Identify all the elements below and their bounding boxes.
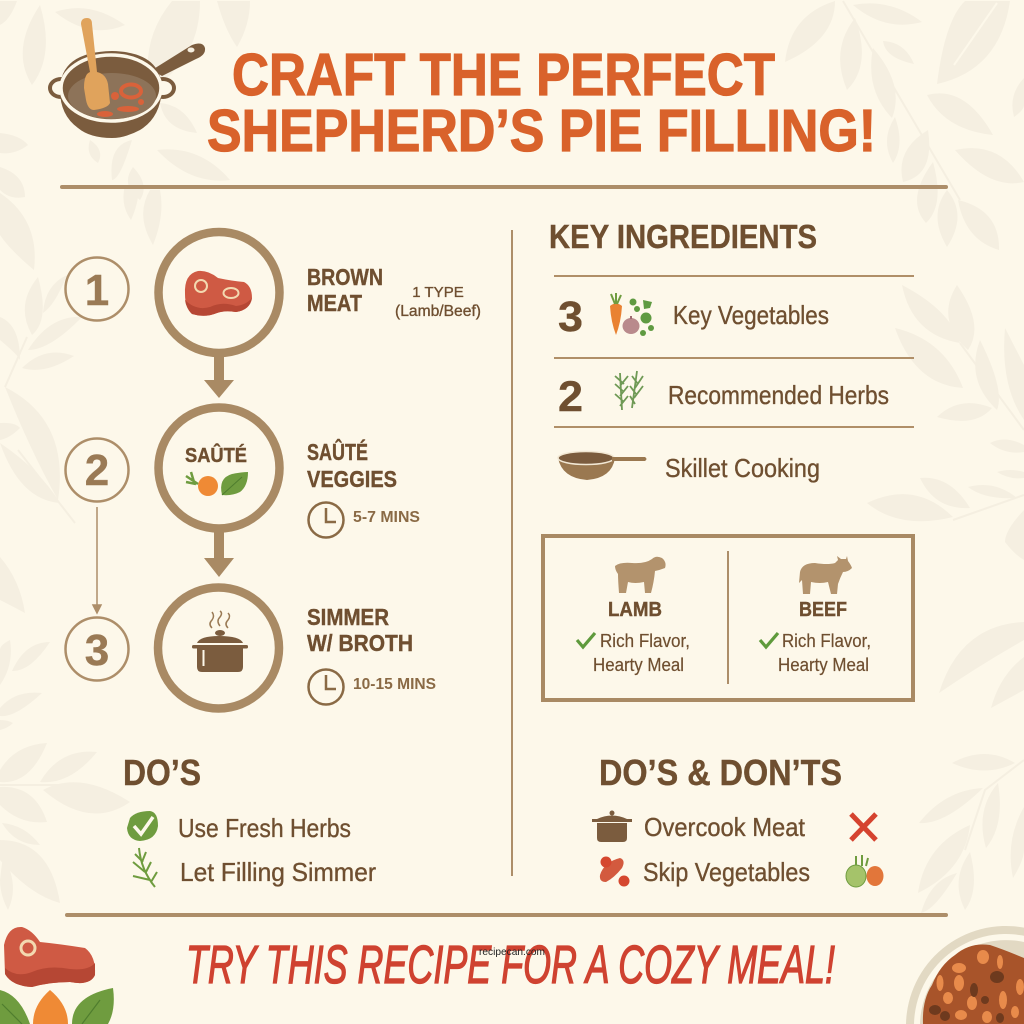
illustration: steak and veggies bottom left — [0, 927, 114, 1024]
title: CRAFT THE PERFECT — [232, 42, 775, 108]
step 2 circle with veggies: SAÛTÉ — [185, 443, 247, 467]
step 3 label: SIMMER — [307, 604, 389, 630]
step 2 label — [307, 438, 397, 492]
ingredient row: vegetables: 3 — [558, 293, 583, 341]
do item: let simmer — [133, 848, 376, 887]
step 2 circle with veggies — [158, 408, 280, 528]
step 3 label: W/ BROTH — [307, 630, 413, 656]
do's and don'ts heading: DO’S & DON’TS — [599, 752, 842, 793]
step 1 number — [66, 258, 128, 320]
arrow: step 1 to step 2 — [204, 356, 234, 398]
icon: herbs — [615, 371, 643, 410]
ingredient row: herbs — [558, 371, 889, 421]
icon: vegetables — [610, 293, 654, 336]
ingredient row: skillet — [558, 452, 820, 483]
beef column: BEEF — [799, 599, 847, 621]
icon: skillet small — [558, 452, 646, 480]
arrow: step 2 to step 3 thin — [93, 507, 101, 613]
step 2 — [66, 408, 420, 538]
step 3 number: 3 — [85, 626, 109, 675]
step 1 label: MEAT — [307, 290, 362, 316]
lamb column: LAMB — [608, 599, 662, 621]
do's heading: DO’S — [123, 752, 201, 793]
step 3 circle with pot — [158, 588, 279, 708]
lamb column — [577, 557, 690, 675]
step 2 time: 5-7 MINS — [353, 509, 420, 526]
do item: let simmer: Let Filling Simmer — [180, 857, 376, 887]
step 1 label — [307, 264, 383, 316]
icon: cow — [799, 556, 852, 594]
don't item: overcook: Overcook Meat — [644, 812, 806, 842]
ingredient row: herbs: 2 — [558, 373, 583, 421]
step 1 circle with steak — [158, 232, 280, 353]
ingredient row: herbs: Recommended Herbs — [668, 380, 889, 410]
ingredient row: vegetables: Key Vegetables — [673, 300, 829, 330]
lamb column: Rich Flavor, — [600, 631, 690, 651]
step 3 label — [307, 604, 413, 656]
panel: lamb vs beef — [543, 536, 913, 700]
title: SHEPHERD’S PIE FILLING! — [207, 98, 876, 164]
don't item: skip vegetables — [600, 855, 884, 887]
arrow: step 2 to step 3 — [204, 531, 234, 577]
key ingredients heading: KEY INGREDIENTS — [549, 218, 817, 255]
beef column: Rich Flavor, — [782, 631, 871, 651]
watermark: recipecan.com — [479, 946, 545, 958]
meat type note: (Lamb/Beef) — [395, 303, 481, 320]
step 3 number — [66, 618, 128, 680]
do item: fresh herbs — [127, 811, 351, 843]
do item: fresh herbs: Use Fresh Herbs — [178, 813, 351, 843]
step 1 — [66, 232, 481, 353]
meat type note — [395, 284, 481, 320]
step 3 time: 10-15 MINS — [353, 676, 436, 693]
step 2 label: VEGGIES — [307, 466, 397, 492]
icon: skillet with spoon — [48, 18, 205, 138]
step 2 label: SAÛTÉ — [307, 438, 368, 465]
step 3 time — [308, 670, 436, 704]
don't item: skip vegetables: Skip Vegetables — [643, 857, 810, 887]
icon: vegetables crossed — [846, 855, 884, 887]
meat type note: 1 TYPE — [412, 284, 464, 301]
step 1 label: BROWN — [307, 264, 383, 290]
ingredient row: vegetables — [558, 293, 829, 341]
don't item: overcook — [592, 810, 876, 842]
icon: lamb — [615, 557, 666, 593]
illustration: bowl of filling bottom right — [906, 926, 1024, 1024]
ingredient row: skillet: Skillet Cooking — [665, 453, 820, 483]
step 2 number — [66, 438, 128, 502]
step 2 number: 2 — [85, 446, 109, 495]
step 1 number: 1 — [85, 266, 109, 315]
title — [207, 42, 876, 164]
beef column: Hearty Meal — [778, 655, 869, 675]
beef column — [760, 556, 871, 675]
icon: red x — [851, 814, 876, 840]
step 3 — [66, 588, 436, 708]
step 2 time — [308, 502, 420, 538]
lamb column: Hearty Meal — [593, 655, 684, 675]
